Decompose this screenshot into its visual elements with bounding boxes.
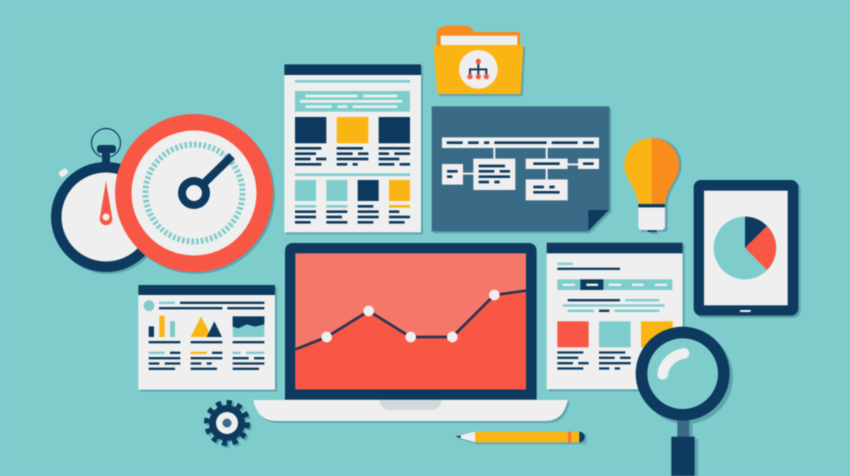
pie chart: [714, 217, 776, 279]
icon: pencil: [455, 432, 587, 444]
panel: flowchart sheet: [432, 106, 611, 233]
icon: magnifying glass: [636, 327, 733, 476]
triangle chart: [191, 316, 222, 337]
icon: speedometer gauge: [115, 114, 275, 274]
line chart: [295, 290, 526, 389]
panel: dashboard document: [138, 285, 277, 392]
panel: report document: [284, 64, 423, 234]
icon: gear: [207, 403, 249, 445]
icon: light bulb: [624, 138, 682, 234]
icon: laptop with line chart: [253, 243, 570, 423]
icon: stopwatch: [51, 128, 163, 274]
panel: search results document: [547, 243, 685, 391]
icon: folder: [433, 26, 525, 96]
icon: tablet with pie chart: [694, 180, 801, 318]
area chart: [233, 316, 264, 337]
bar chart: [149, 316, 175, 337]
